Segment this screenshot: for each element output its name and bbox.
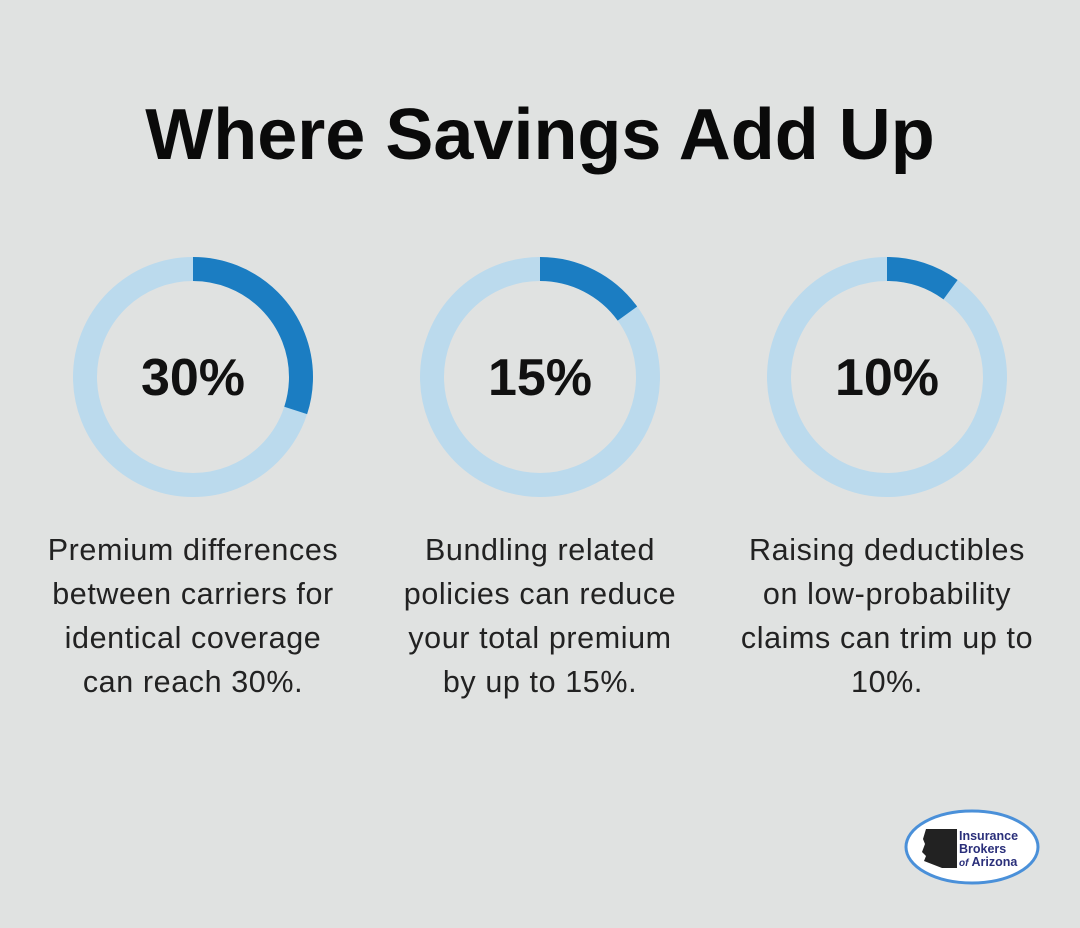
text: bundling: policies can reduce	[404, 577, 676, 611]
text: bundling: Bundling related	[425, 533, 655, 567]
donut: 30%	[73, 257, 313, 497]
donut: 15%: 15%	[488, 349, 592, 407]
donut: 30%: 30%	[141, 349, 245, 407]
title: Where Savings Add Up	[145, 95, 935, 175]
logo: of Arizona	[959, 855, 1018, 869]
text: deductibles	[741, 533, 1033, 699]
logo	[904, 810, 1040, 884]
text: carriers: can reach 30%.	[83, 665, 303, 699]
logo: Brokers	[959, 842, 1006, 856]
text: deductibles: on low-probability	[763, 577, 1011, 611]
text: deductibles: 10%.	[851, 665, 923, 699]
text: carriers: between carriers for	[52, 577, 334, 611]
text: bundling: your total premium	[408, 621, 672, 655]
logo: Insurance	[959, 829, 1018, 843]
text: bundling	[404, 533, 676, 699]
text: deductibles: claims can trim up to	[741, 621, 1033, 655]
donut: 15%	[420, 257, 660, 497]
donut: 10%	[767, 257, 1007, 497]
text: bundling: by up to 15%.	[443, 665, 637, 699]
donut: 10%: 10%	[835, 349, 939, 407]
text: carriers: Premium differences	[48, 533, 338, 567]
text: carriers: identical coverage	[65, 621, 321, 655]
text: deductibles: Raising deductibles	[749, 533, 1025, 567]
text: carriers	[48, 533, 338, 699]
